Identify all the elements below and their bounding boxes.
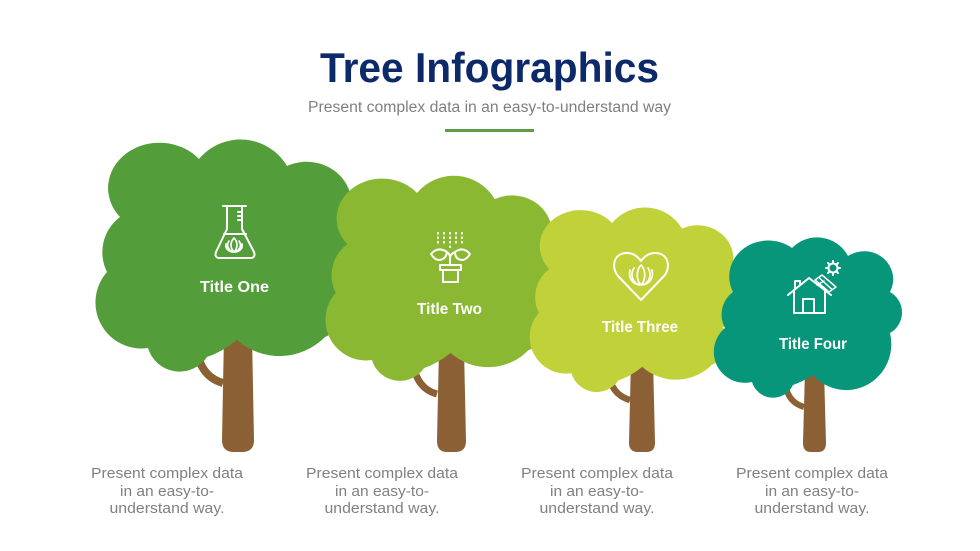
branch three [611,383,630,400]
caption three [521,465,674,517]
crown one [95,140,372,372]
branch four [787,391,804,407]
subtitle: Present complex data in an easy-to-understand way [308,99,671,116]
accent underline [445,129,534,132]
label: title four: Title Four [779,336,847,353]
caption three: in an easy-to- [550,483,644,500]
caption one: understand way. [110,500,224,517]
crown three [530,208,749,392]
icon: potted plant with rain [431,232,470,282]
label: title two: Title Two [417,301,482,318]
icon: flask with lotus [216,206,254,258]
tree three [530,208,749,452]
crown four [714,237,902,398]
crown two [325,176,570,381]
caption two: in an easy-to- [335,483,429,500]
branch one [200,362,223,383]
caption two: Present complex data [306,465,459,482]
trunk four [803,370,826,452]
tree one [95,140,372,452]
caption two [306,465,459,517]
caption one: in an easy-to- [120,483,214,500]
label: title three: Title Three [602,319,678,336]
caption four: understand way. [754,500,870,517]
tree four [714,237,902,452]
trunk two [437,348,466,452]
tree two [325,176,570,452]
trunk one [222,335,254,452]
caption one [91,465,244,517]
caption three: Present complex data [521,465,674,482]
icon: heart with lotus [614,253,668,300]
caption two: understand way. [324,500,440,517]
label: title one: Title One [200,279,269,296]
title: Tree Infographics [320,44,659,91]
icon: house with solar panel [788,261,840,313]
caption four: Present complex data [736,465,889,482]
caption four [736,465,889,517]
branch two [416,375,437,394]
trunk three [629,359,655,452]
caption three: understand way. [540,500,654,517]
caption four: in an easy-to- [765,483,859,500]
caption one: Present complex data [91,465,244,482]
